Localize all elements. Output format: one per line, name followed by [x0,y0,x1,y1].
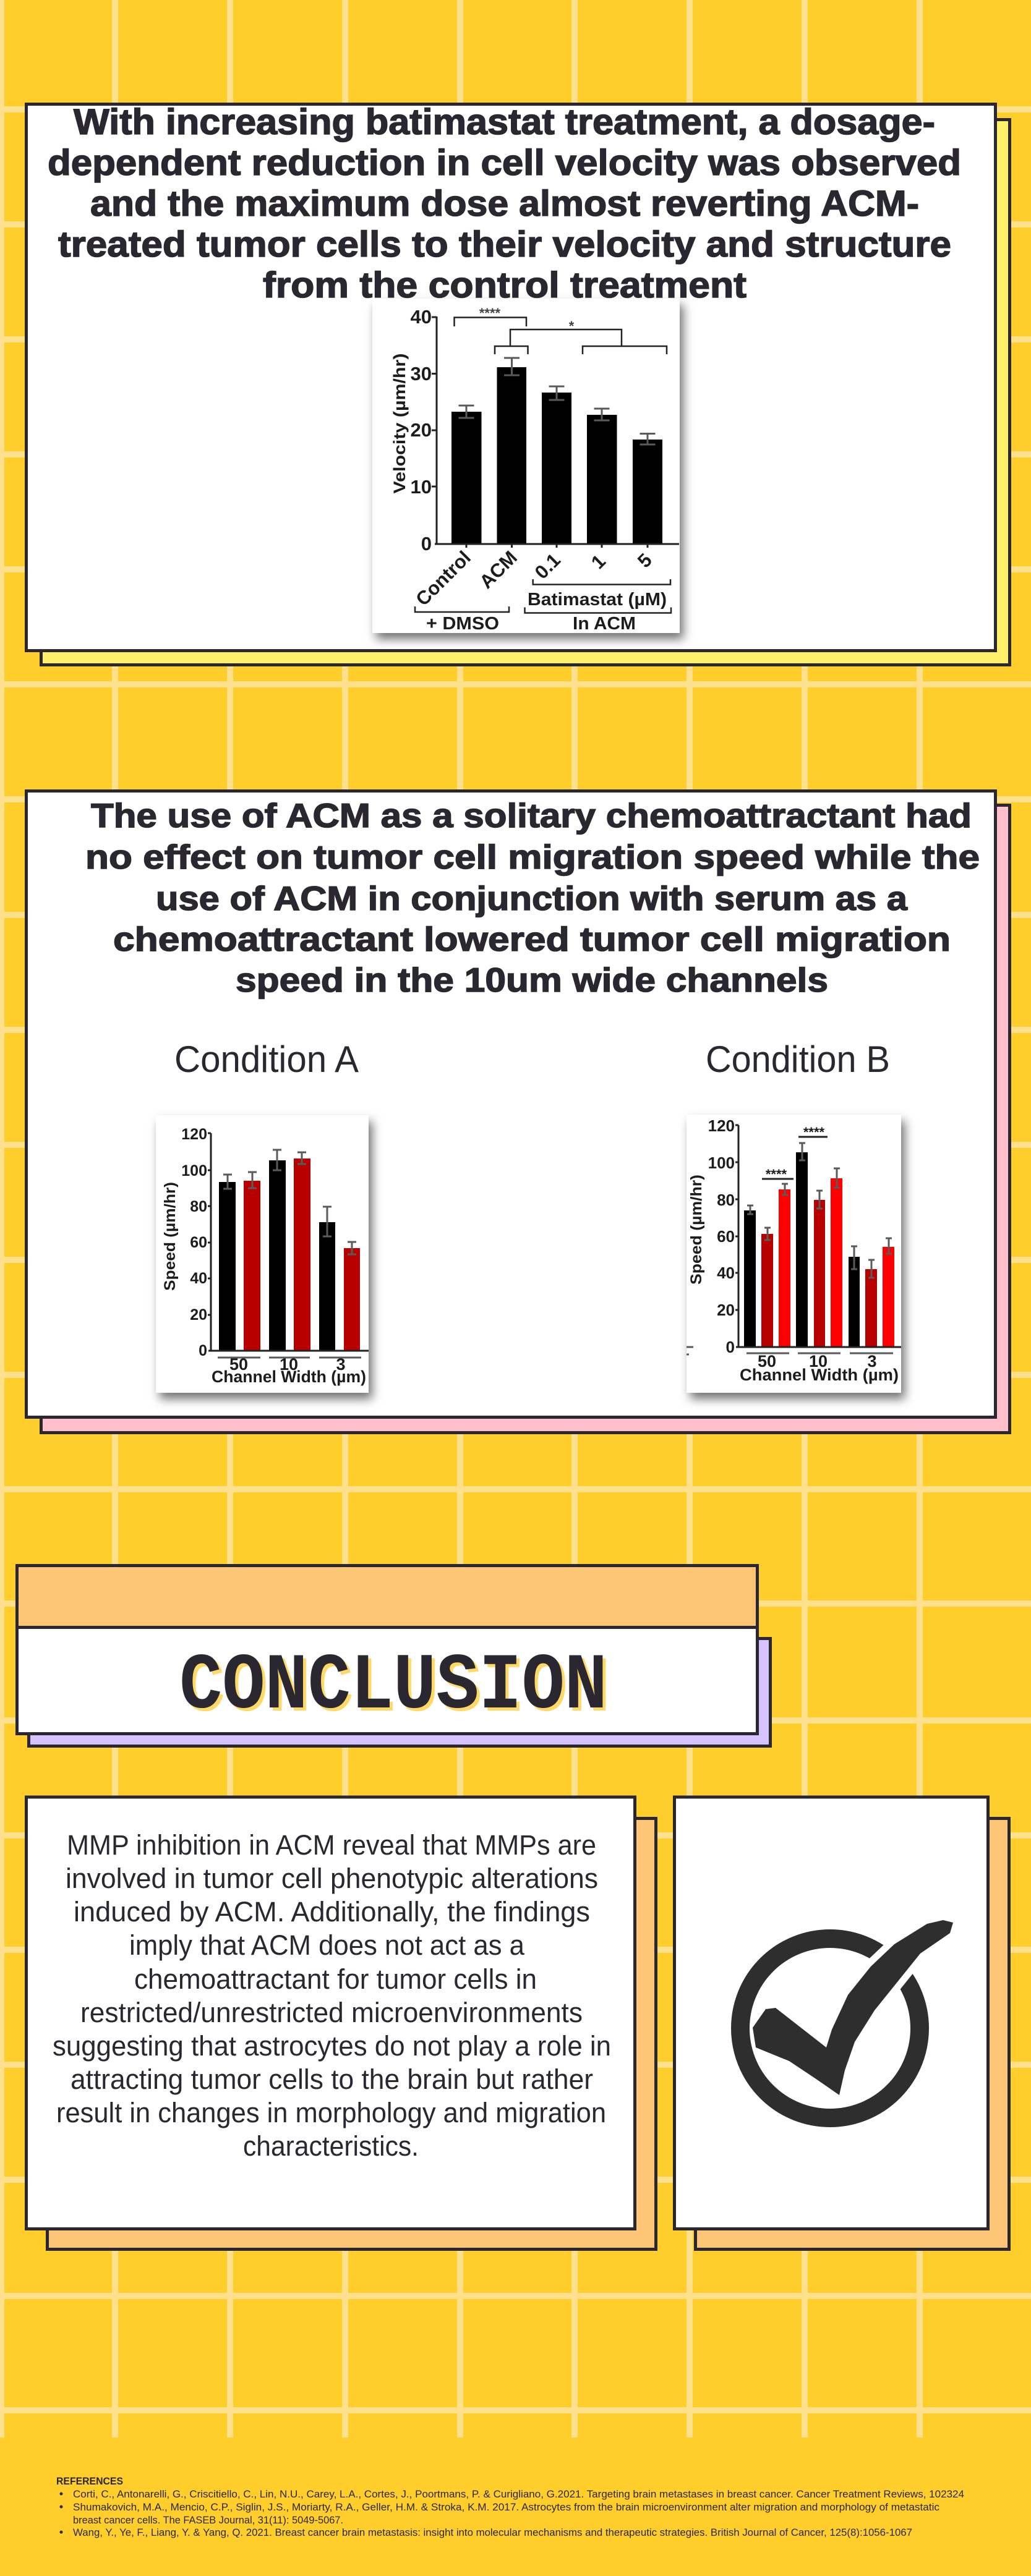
significance stars [479,305,575,334]
x axis category labels: 0.1 [531,549,565,583]
y axis tick labels: 40 [190,1270,207,1287]
conclusion paragraph: characteristics. [243,2130,419,2162]
y axis tick labels: 0 [199,1342,207,1359]
channel group lines [218,1356,361,1359]
panel: ACM chemoattractant [26,791,1009,1433]
banner tab: orange [17,1565,757,1627]
axes [208,1133,369,1351]
group brackets [415,579,671,613]
conclusion paragraph: suggesting that astrocytes do not play a role in [53,2030,611,2062]
channel labels: 10 [280,1355,298,1374]
y axis label: Speed (µm/hr) [688,1175,705,1285]
heading: batimastat finding [48,102,961,305]
panel backing: orange [47,1819,656,2249]
bars [219,1158,360,1351]
heading: batimastat finding: With increasing batimastat treatment, a dosage- [74,102,935,142]
references [56,2475,964,2538]
significance lines and stars: **** [803,1124,825,1140]
reference list [73,2488,964,2538]
y axis tick labels: 80 [717,1191,735,1209]
heading: batimastat finding: from the control treatment [263,265,747,305]
y axis tick labels [181,1126,207,1359]
heading: chemoattractant finding: chemoattractant lowered tumor cell migration [113,920,951,958]
icon: check mark in circle [740,1920,953,2118]
heading: chemoattractant finding: use of ACM in conjunction with serum as a [156,879,907,917]
group labels [426,590,667,634]
panel backing: orange [695,1819,1009,2249]
y axis label: Velocity (µm/hr) [390,354,409,493]
panel backing: pink [41,805,1009,1433]
y axis tick labels: 100 [181,1162,207,1180]
axes [735,1125,901,1347]
x axis category labels: 1 [587,550,610,573]
conclusion paragraph: attracting tumor cells to the brain but rather [71,2064,593,2095]
conclusion paragraph: restricted/unrestricted microenvironments [80,1997,583,2028]
channel labels: 50 [229,1355,248,1374]
x axis category labels: ACM [475,546,521,593]
x axis category labels: Control [411,546,475,610]
panel face: white [26,791,996,1417]
axes [432,317,679,548]
bars [451,367,662,544]
conclusion paragraph: MMP inhibition in ACM reveal that MMPs are [67,1829,596,1861]
heading: chemoattractant finding: The use of ACM as a solitary chemoattractant had [91,796,972,835]
y axis tick labels: 120 [181,1126,207,1143]
x axis title: Channel Width (µm) [740,1366,899,1384]
x axis category labels: 5 [633,549,656,572]
x axis category labels [411,546,656,610]
panel backing: yellow [41,120,1009,665]
reference list: Corti, C., Antonarelli, G., Criscitiello, C., Lin, N.U., Carey, L.A., Cortes, J., Poortmans, P. & Curigliano, G.2021. Targeting brain metastases in breast cancer. Cancer Treatment Reviews, 102324 [73,2488,964,2500]
heading: batimastat finding: treated tumor cells to their velocity and structure [58,224,951,265]
y axis tick labels: 40 [411,306,432,328]
y axis tick labels: 0 [421,533,432,555]
significance stars: **** [479,305,501,321]
panel: conclusion text [26,1797,656,2249]
banner backing: lilac [28,1638,771,1746]
channel group lines [687,1347,893,1354]
panel face: white [26,104,996,650]
panel face: white [674,1797,988,2229]
channel labels: 50 [758,1352,776,1371]
conclusion paragraph: chemoattractant for tumor cells in [134,1963,537,1995]
y axis tick labels [708,1116,735,1356]
heading: CONCLUSION: CONCLUSION [179,1642,607,1732]
label: Condition A: Condition A [174,1039,359,1080]
group labels: + DMSO [426,614,499,634]
heading: chemoattractant finding: speed in the 10um wide channels [236,961,828,999]
y axis tick labels: 40 [717,1264,735,1282]
group labels: In ACM [573,614,636,634]
panel: batimastat velocity [26,102,1009,665]
heading: chemoattractant finding: no effect on tumor cell migration speed while the [85,838,980,876]
significance stars: * [569,318,575,334]
y axis tick labels: 20 [190,1306,207,1324]
significance lines and stars [762,1124,828,1182]
significance lines and stars: **** [766,1167,787,1182]
y axis tick labels: 10 [411,476,432,498]
reference list: breast cancer cells. The FASEB Journal, 31(11): 5049-5067. [73,2514,343,2526]
banner face: white [17,1627,757,1733]
heading: batimastat finding: dependent reduction in cell velocity was observed [48,143,961,183]
conclusion paragraph: involved in tumor cell phenotypic alterations [66,1863,598,1894]
channel labels [229,1355,346,1374]
y axis tick labels: 0 [726,1338,735,1356]
panel face: white [26,1797,635,2229]
error bars [747,1143,892,1278]
reference bullets [59,2493,63,2533]
error bars [223,1150,356,1254]
references heading: REFERENCES [56,2475,123,2487]
y axis tick labels: 80 [190,1198,207,1215]
channel labels: 3 [867,1352,877,1371]
y axis tick labels: 30 [411,363,432,385]
heading: chemoattractant finding [85,796,980,999]
significance brackets [454,318,667,354]
bars [744,1152,894,1347]
conclusion banner [17,1565,771,1746]
conclusion paragraph [53,1829,611,2162]
channel labels [758,1352,877,1371]
y axis tick labels [411,306,432,555]
bar chart: velocity vs batimastat dose [372,299,680,634]
reference list: Wang, Y., Ye, F., Liang, Y. & Yang, Q. 2021. Breast cancer brain metastasis: insight into molecular mechanisms and therapeutic strategies. British Journal of Cancer, 125(8):1056-1067 [73,2527,912,2538]
panel: check icon [674,1797,1009,2249]
y axis tick labels: 60 [190,1234,207,1251]
label: Condition B: Condition B [706,1039,890,1080]
heading: CONCLUSION: CONCLUSION [182,1645,610,1735]
channel labels: 10 [809,1352,828,1371]
heading: batimastat finding: and the maximum dose almost reverting ACM- [90,184,919,224]
conclusion paragraph: induced by ACM. Additionally, the findings [74,1896,590,1928]
channel labels: 3 [336,1355,346,1374]
y axis tick labels: 60 [717,1227,735,1246]
bar chart: condition B speed [687,1115,901,1393]
y axis tick labels: 20 [717,1301,735,1319]
y axis tick labels: 20 [411,419,432,441]
y axis tick labels: 100 [708,1154,735,1172]
error bars [459,358,656,444]
y axis tick labels: 120 [708,1116,735,1135]
conclusion paragraph: result in changes in morphology and migration [56,2097,606,2128]
y axis label: Speed (µm/hr) [161,1182,179,1291]
bar chart: condition A speed [156,1115,369,1393]
group labels: Batimastat (µM) [528,590,667,610]
reference list: Shumakovich, M.A., Mencio, C.P., Siglin, J.S., Moriarty, R.A., Geller, H.M. & Stroka, K.M. 2017. Astrocytes from the brain microenvironment alter migration and morphology of metastatic [73,2501,939,2513]
conclusion paragraph: imply that ACM does not act as a [129,1929,525,1961]
x axis title: Channel Width (µm) [212,1367,366,1386]
